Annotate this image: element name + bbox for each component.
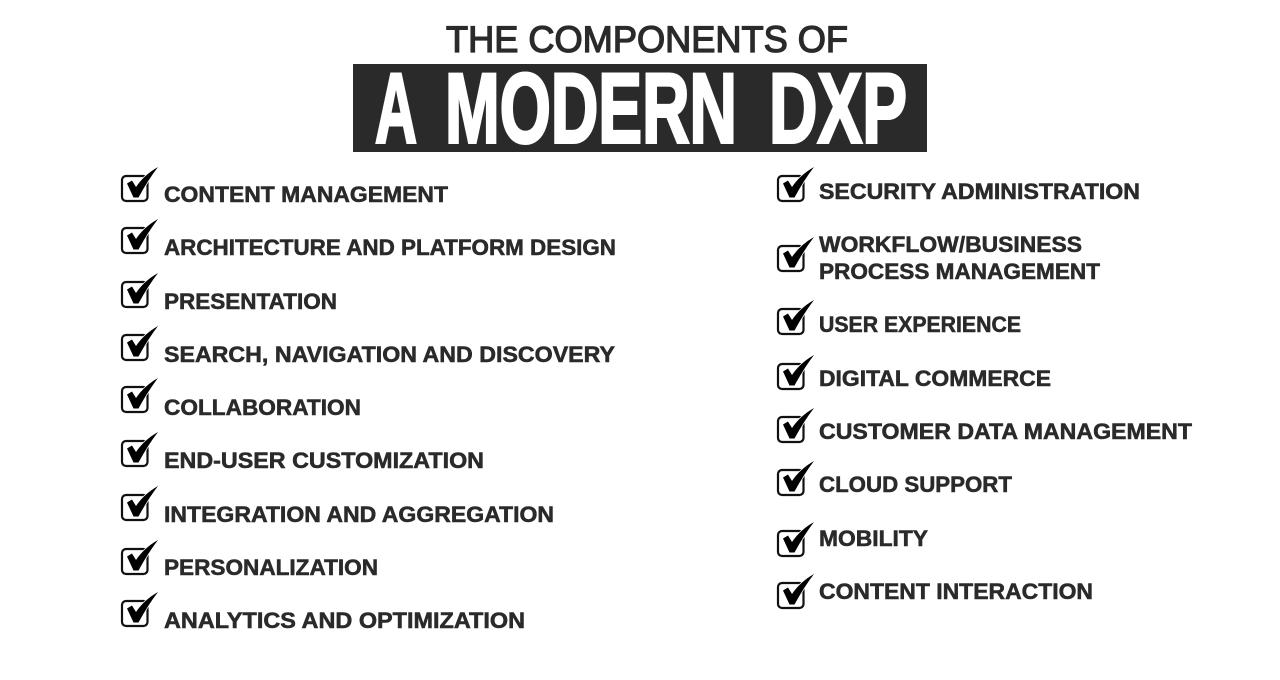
item: analytics and optimization <box>122 592 525 633</box>
label: SECURITY ADMINISTRATION <box>819 179 1140 204</box>
item: personalization <box>122 540 378 580</box>
label: ANALYTICS AND OPTIMIZATION <box>164 608 525 633</box>
banner: a modern dxp: DXP <box>769 52 907 164</box>
label: CLOUD SUPPORT <box>819 472 1013 497</box>
label: PRESENTATION <box>164 289 337 314</box>
label: CUSTOMER DATA MANAGEMENT <box>819 419 1193 444</box>
icon: checkbox <box>122 486 158 520</box>
item: search, navigation and discovery <box>122 326 615 367</box>
item: architecture and platform design <box>122 219 616 260</box>
icon: checkbox <box>778 355 814 389</box>
label: END-USER CUSTOMIZATION <box>164 448 484 473</box>
icon: checkbox <box>122 219 158 253</box>
label: PROCESS MANAGEMENT <box>819 259 1101 284</box>
icon: checkbox <box>122 326 158 360</box>
item: workflow/business process management <box>778 232 1101 284</box>
item: collaboration <box>122 378 361 420</box>
item: user experience <box>778 300 1021 337</box>
item: integration and aggregation <box>122 486 554 527</box>
icon: checkbox <box>778 522 814 556</box>
panel: left checklist <box>122 167 616 633</box>
label: CONTENT MANAGEMENT <box>164 182 449 207</box>
banner: a modern dxp: A <box>375 52 417 164</box>
icon: checkbox <box>778 408 814 442</box>
icon: checkbox <box>778 237 814 271</box>
item: security administration <box>778 167 1140 204</box>
icon: checkbox <box>122 592 158 626</box>
label: ARCHITECTURE AND PLATFORM DESIGN <box>164 235 616 260</box>
item: content interaction <box>778 574 1093 608</box>
icon: checkbox <box>778 574 814 608</box>
label: USER EXPERIENCE <box>819 312 1021 337</box>
item: end-user customization <box>122 432 484 473</box>
icon: checkbox <box>122 540 158 574</box>
icon: checkbox <box>122 378 158 412</box>
item: mobility <box>778 522 928 556</box>
label: DIGITAL COMMERCE <box>819 366 1051 391</box>
item: customer data management <box>778 408 1193 444</box>
icon: checkbox <box>778 300 814 334</box>
label: SEARCH, NAVIGATION AND DISCOVERY <box>164 342 615 367</box>
label: INTEGRATION AND AGGREGATION <box>164 502 554 527</box>
icon: checkbox <box>778 167 814 201</box>
title <box>353 19 927 164</box>
label <box>819 232 1101 284</box>
icon: checkbox <box>778 461 814 495</box>
label: MOBILITY <box>819 526 928 551</box>
item: content management <box>122 167 449 207</box>
icon: checkbox <box>122 273 158 307</box>
item: digital commerce <box>778 355 1051 391</box>
banner: a modern dxp: MODERN <box>445 52 737 164</box>
label: CONTENT INTERACTION <box>819 579 1093 604</box>
heading: the components of: THE COMPONENTS OF <box>446 19 848 60</box>
item: cloud support <box>778 461 1013 497</box>
panel: right checklist <box>778 167 1193 608</box>
icon: checkbox <box>122 432 158 466</box>
label: WORKFLOW/BUSINESS <box>819 232 1082 257</box>
label: PERSONALIZATION <box>164 555 378 580</box>
icon: checkbox <box>122 167 158 201</box>
item: presentation <box>122 273 337 314</box>
label: COLLABORATION <box>164 395 361 420</box>
